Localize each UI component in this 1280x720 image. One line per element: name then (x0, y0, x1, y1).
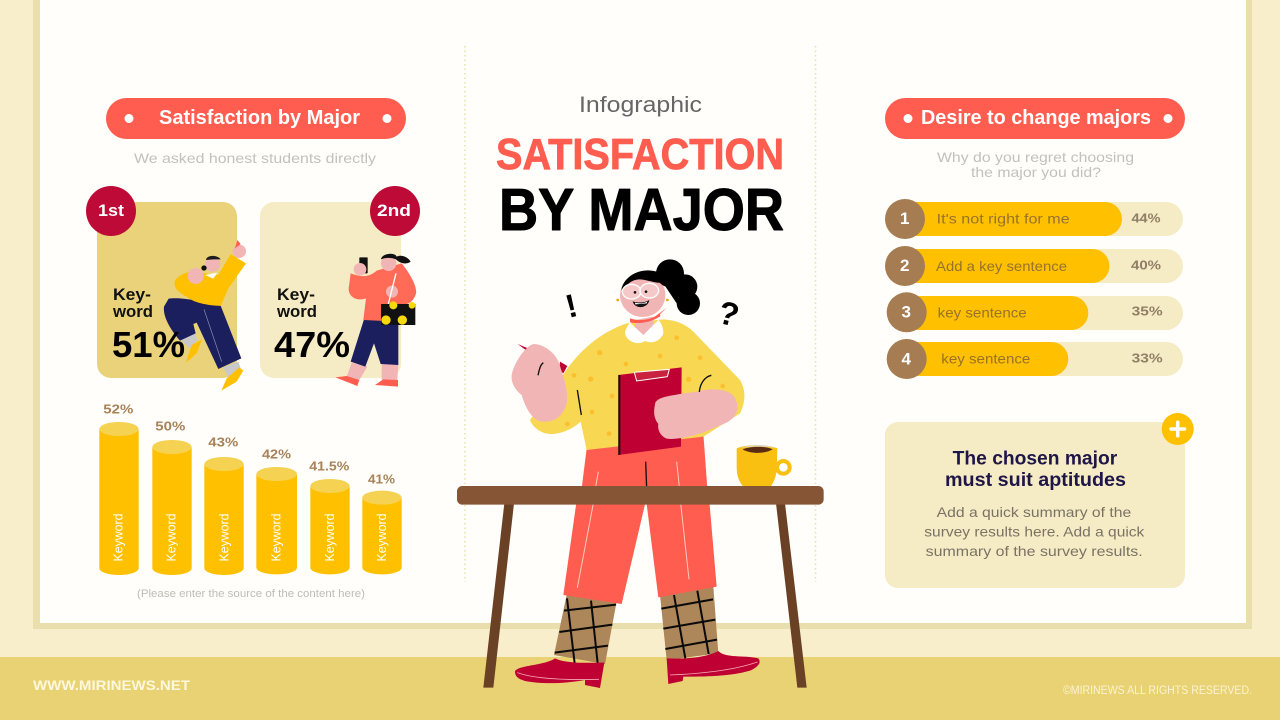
callout heading (945, 448, 1126, 491)
cylinder bar chart: Keyword (164, 513, 178, 562)
cylinder bar chart: 43% (208, 435, 239, 450)
progress row 1: 44% (1132, 210, 1161, 225)
legs and shoes (515, 493, 760, 688)
progress row 4: 33% (1132, 350, 1163, 365)
coffee cup (737, 445, 790, 488)
badge: 2nd (370, 186, 420, 236)
card: 2nd place: word (276, 302, 317, 321)
cylinder bar chart: Keyword (218, 513, 232, 562)
callout body: survey results here. Add a quick (924, 524, 1145, 540)
title line: SATISFACTION: SATISFACTION (496, 130, 784, 179)
progress row 4: key sentence (941, 350, 1031, 366)
heading pill: Satisfaction by Major: Satisfaction by Major (159, 107, 360, 129)
progress row 1: It's not right for me (937, 210, 1070, 226)
subheading: the major you did? (971, 164, 1101, 180)
value: 51%: 51% (112, 324, 185, 365)
progress row 2: Add a key sentence (936, 258, 1067, 274)
cylinder bar chart: 41% (368, 471, 395, 486)
heading pill: Satisfaction by Major (106, 98, 406, 139)
progress row 2 (885, 246, 1183, 286)
cylinder bar chart: Keyword (270, 513, 284, 562)
footer website: WWW.MIRINEWS.NET (33, 677, 190, 693)
card: 2nd place (260, 186, 420, 387)
exclamation mark: ! (561, 286, 581, 325)
icon: plus (1162, 413, 1194, 445)
progress row 3: key sentence (938, 304, 1027, 320)
source note: (Please enter the source of the content here) (137, 588, 365, 600)
card: 1st place (86, 186, 246, 391)
badge: 1st (86, 186, 136, 236)
eyebrow: Infographic: Infographic (579, 92, 702, 117)
callout body: Add a quick summary of the (937, 504, 1131, 520)
hand holding pen (512, 344, 567, 422)
hand holding clipboard (654, 389, 737, 439)
cylinder bar chart (99, 401, 402, 575)
callout heading: must suit aptitudes (945, 470, 1126, 491)
callout heading: The chosen major (953, 448, 1118, 470)
subheading (937, 149, 1134, 180)
label: Keyword: Key- (277, 285, 315, 304)
card: 1st place: word (112, 302, 153, 321)
callout body: summary of the survey results. (926, 543, 1143, 559)
center title block (496, 92, 784, 243)
cylinder bar chart: Keyword (323, 513, 337, 562)
progress row 4: 4 (902, 350, 912, 368)
badge: 1st: 1st (98, 201, 124, 220)
value: 47%: 47% (274, 324, 350, 365)
question mark: ? (715, 293, 743, 334)
progress row 3: 35% (1132, 304, 1163, 319)
illustration: singing man (164, 240, 246, 391)
callout card (885, 413, 1194, 588)
footer copyright: ©MIRINEWS ALL RIGHTS RESERVED. (1063, 685, 1252, 697)
progress row 3: 3 (902, 302, 911, 322)
progress row 3 (887, 292, 1183, 332)
progress row 2: 2 (900, 256, 909, 275)
upper body (512, 259, 790, 488)
callout body (924, 504, 1145, 559)
label: Keyword: Key- (113, 285, 151, 304)
progress row 4 (887, 339, 1183, 379)
clipboard (618, 367, 682, 455)
cylinder bar chart: 52% (103, 401, 134, 416)
heading pill: Desire to change majors (885, 98, 1185, 139)
badge: 2nd: 2nd (377, 201, 411, 220)
subheading: We asked honest students directly (134, 150, 376, 166)
progress row 2: 40% (1131, 257, 1161, 272)
subheading: Why do you regret choosing (937, 149, 1134, 165)
pen (518, 344, 537, 359)
progress row 1: 1 (900, 209, 909, 228)
cylinder bar chart: Keyword (112, 513, 126, 562)
illustration: woman with phone and bag (335, 254, 416, 387)
title line: BY MAJOR: BY MAJOR (499, 177, 784, 243)
progress row 1 (885, 199, 1183, 239)
cylinder bar chart: 41.5% (309, 458, 350, 473)
left panel: satisfaction by major (86, 98, 420, 600)
table (457, 486, 824, 688)
cylinder bar chart: Keyword (375, 513, 389, 562)
cylinder bar chart: 50% (155, 419, 186, 434)
right panel: desire to change majors (885, 98, 1194, 588)
cylinder bar chart: 42% (262, 446, 291, 461)
heading pill: Desire to change majors: Desire to change majors (921, 107, 1151, 129)
illustration: woman at table (457, 259, 824, 688)
